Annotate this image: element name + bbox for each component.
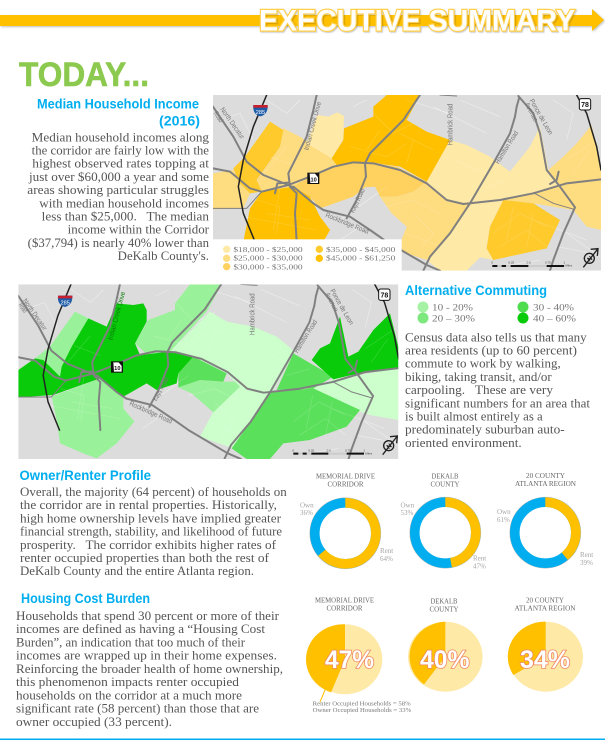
icon: state route 10 shield xyxy=(307,173,319,184)
income body text: income within the Corridor xyxy=(68,223,210,237)
road labels xyxy=(17,288,354,426)
scale bar: 0.5 xyxy=(327,448,331,452)
road labels: Hamilton Road xyxy=(293,319,319,354)
commuting body text: oriented environment. xyxy=(405,436,522,450)
scale bar: 0 xyxy=(491,261,493,265)
pie: dekalb county: 40% xyxy=(420,646,470,674)
road labels: Avenue xyxy=(323,292,339,313)
road labels xyxy=(212,98,554,236)
donut: dekalb county: COUNTY xyxy=(430,480,460,488)
legend: income: $18,000 - $25,000 xyxy=(233,245,303,254)
pie: memorial drive corridor: 47% xyxy=(325,646,374,674)
housing cost body text: Households that spend 30 percent or more of their xyxy=(16,609,280,623)
legend: commuting: 40 – 60% xyxy=(533,314,576,324)
commuting body text xyxy=(405,330,590,450)
legend: income xyxy=(213,239,402,271)
banner title: EXECUTIVE SUMMARY xyxy=(259,4,575,38)
owner renter body text xyxy=(20,485,287,578)
housing cost body text: significant rate (58 percent) than those that are xyxy=(16,702,259,716)
owner renter body text: high home ownership levels have implied greater xyxy=(20,511,282,525)
income body text: Median household incomes along xyxy=(32,130,210,144)
scale bar: 0 xyxy=(292,448,294,452)
donut: dekalb county: Own xyxy=(400,502,415,510)
pie: 20 county atlanta region: 20 COUNTY xyxy=(526,596,565,605)
donut: 20 county atlanta region: 20 COUNTY xyxy=(526,471,566,480)
pie: dekalb county xyxy=(408,596,483,692)
icon: north arrow xyxy=(383,436,397,455)
banner arrow xyxy=(0,9,604,31)
scale bar: 0.25 xyxy=(308,448,314,452)
commuting body text: Census data also tells us that many xyxy=(405,330,587,344)
panel: housing cost burden text xyxy=(16,590,283,729)
owner renter body text: prosperity. The corridor exhibits higher rates of xyxy=(20,538,277,552)
donut: memorial drive corridor: Rent xyxy=(380,547,393,555)
income body text: less than $25,000. The median xyxy=(42,210,210,224)
road labels: North Decatur xyxy=(218,106,245,141)
icon: interstate 285 shield xyxy=(58,296,72,307)
icon: north arrow: N xyxy=(587,256,594,263)
scale bar: 1 xyxy=(563,261,565,265)
panel: median household income text xyxy=(27,96,210,263)
scale bar: 0.5 xyxy=(527,261,531,265)
heading: median household income xyxy=(37,96,200,128)
housing cost body text: owner occupied (33 percent). xyxy=(16,715,172,729)
commuting body text: is built almost entirely as a xyxy=(405,410,543,424)
map: alternative commuting xyxy=(17,284,399,459)
scale bar: 1 xyxy=(363,448,365,452)
donut: memorial drive corridor xyxy=(300,472,393,569)
legend: commuting: 30 - 40% xyxy=(533,304,574,314)
road labels: Avenue xyxy=(523,102,539,123)
commuting body text: predominately suburban auto- xyxy=(405,423,565,437)
icon: US 78 shield xyxy=(579,99,591,110)
pie: memorial drive corridor: Renter Occupied Households = 58% xyxy=(313,702,411,708)
donut: dekalb county: DEKALB xyxy=(432,472,459,480)
housing cost body text: incomes are wrapped up in their home expenses. xyxy=(16,649,277,663)
heading: median household income: Median Household Income xyxy=(37,96,199,112)
donut: 20 county atlanta region: 39% xyxy=(580,559,593,567)
commuting body text: carpooling. These are very xyxy=(405,383,554,397)
road labels: Ponce de Leon xyxy=(328,288,354,326)
income body text: just over $60,000 a year and some xyxy=(28,170,209,184)
icon: US 78 shield: 78 xyxy=(380,292,388,299)
scale bar xyxy=(292,448,373,455)
icon: state route 10 shield: 10 xyxy=(114,366,120,372)
icon: interstate 285 shield: 285 xyxy=(60,301,70,307)
income body text: ($37,794) is nearly 40% lower than xyxy=(28,236,210,250)
road labels: Rockbridge Road xyxy=(324,212,370,236)
icon: US 78 shield xyxy=(379,289,390,300)
owner renter body text: DeKalb County and the entire Atlanta region. xyxy=(20,564,254,578)
commuting body text: area residents (up to 60 percent) xyxy=(405,344,577,358)
pie: 20 county atlanta region: ATLANTA REGION xyxy=(514,604,576,613)
donut: 20 county atlanta region: Own xyxy=(497,508,511,516)
donut: memorial drive corridor: CORRIDOR xyxy=(328,480,364,488)
donut: dekalb county: Rent xyxy=(473,554,486,562)
legend: commuting: 20 – 30% xyxy=(432,314,475,324)
donut: 20 county atlanta region: Rent xyxy=(580,551,593,559)
income body text: DeKalb County's. xyxy=(118,249,209,263)
heading: housing cost burden: Housing Cost Burden xyxy=(21,590,150,606)
donut: memorial drive corridor: 36% xyxy=(300,509,313,517)
pie: 20 county atlanta region: 34% xyxy=(520,646,570,674)
legend: commuting xyxy=(418,302,576,324)
icon: north arrow: N xyxy=(386,443,393,451)
legend: income: $35,000 - $45,000 xyxy=(326,245,396,254)
header banner: executive summary xyxy=(0,4,604,38)
housing cost body text xyxy=(16,609,283,729)
donut: dekalb county xyxy=(400,472,486,570)
scale bar xyxy=(491,261,573,268)
pie: memorial drive corridor: MEMORIAL DRIVE xyxy=(315,596,374,605)
donut: memorial drive corridor: Own xyxy=(300,502,314,510)
commuting body text: significant numbers for an area that xyxy=(405,396,590,410)
road labels: Indian Creek Drive xyxy=(304,101,323,151)
donut: 20 county atlanta region: 61% xyxy=(497,516,510,524)
map: median household income xyxy=(212,95,601,271)
housing cost body text: Burden”, an indication that too much of their xyxy=(16,636,246,650)
donut: 20 county atlanta region: ATLANTA REGION xyxy=(515,479,577,488)
pie: memorial drive corridor xyxy=(306,596,411,714)
legend: income: $45,000 - $61,250 xyxy=(326,254,396,263)
heading: today: TODAY... xyxy=(19,56,149,94)
panel: owner renter profile text xyxy=(20,467,287,578)
housing cost body text: this phenomenon impacts renter occupied xyxy=(16,675,240,689)
road labels: North Decatur xyxy=(21,298,48,332)
road labels: Road xyxy=(17,302,28,314)
scale bar: Miles xyxy=(365,451,373,455)
housing cost body text: incomes are defined as having a “Housing Cost xyxy=(16,622,265,636)
donut: memorial drive corridor: MEMORIAL DRIVE xyxy=(316,472,375,480)
legend: commuting: 10 - 20% xyxy=(432,304,473,314)
housing cost body text: households on the corridor at a much more xyxy=(16,688,242,702)
heading: median household income: (2016) xyxy=(159,112,200,128)
icon: state route 10 shield: 10 xyxy=(311,177,317,183)
income body text: with median household incomes xyxy=(39,196,209,210)
donut: dekalb county: 53% xyxy=(400,509,414,517)
scale bar: 0.75 xyxy=(545,261,551,265)
donut: 20 county atlanta region xyxy=(497,471,593,568)
scale bar: 0.75 xyxy=(345,448,351,452)
road labels: Indian Creek Drive xyxy=(108,291,127,341)
commuting body text: commute to work by walking, xyxy=(405,357,561,371)
income body text: highest observed rates topping at xyxy=(32,157,209,171)
icon: state route 10 shield xyxy=(111,361,123,373)
scale bar: 0.25 xyxy=(508,261,514,265)
panel: alternative commuting text xyxy=(405,282,590,450)
pie: memorial drive corridor: Owner Occupied Households = 33% xyxy=(313,708,411,714)
icon: north arrow xyxy=(583,249,598,267)
housing cost body text: Reinforcing the broader health of home ownership, xyxy=(16,662,283,676)
icon: interstate 285 shield xyxy=(253,105,268,116)
donut: memorial drive corridor: 64% xyxy=(380,555,393,563)
road labels: Hambrick Road xyxy=(249,293,256,335)
road labels: Kays Road xyxy=(349,188,367,214)
pie: memorial drive corridor: CORRIDOR xyxy=(326,604,363,613)
heading: alternative commuting: Alternative Commuting xyxy=(405,282,547,298)
pie: dekalb county: DEKALB xyxy=(430,596,458,605)
donut: dekalb county: 47% xyxy=(473,562,486,570)
road labels: Road xyxy=(212,110,224,124)
owner renter body text: renter occupied properties than both the rest of xyxy=(20,551,270,565)
icon: US 78 shield: 78 xyxy=(581,102,589,109)
scale bar: Miles xyxy=(565,264,573,268)
pie: dekalb county: COUNTY xyxy=(430,604,459,613)
owner renter body text: financial strength, stability, and likelihood of future xyxy=(20,525,282,539)
heading: owner renter profile: Owner/Renter Profile xyxy=(20,467,151,483)
owner renter body text: Overall, the majority (64 percent) of households on xyxy=(20,485,287,499)
legend: income: $25,000 - $30,000 xyxy=(233,254,303,263)
road labels: Hamilton Road xyxy=(494,130,520,165)
road labels: Hambrick Road xyxy=(448,104,455,145)
chart: housing cost burden pies xyxy=(306,596,583,714)
commuting body text: biking, taking transit, and/or xyxy=(405,370,552,384)
legend: income: $30,000 - $35,000 xyxy=(233,262,303,271)
income body text xyxy=(27,130,210,263)
owner renter body text: the corridor are in rental properties. Historically, xyxy=(20,498,277,512)
income body text: the corridor are fairly low with the xyxy=(32,144,209,158)
pie: 20 county atlanta region xyxy=(508,596,583,692)
icon: interstate 285 shield: 285 xyxy=(256,110,265,116)
road labels: Ponce de Leon xyxy=(528,98,554,136)
road labels: Kays Road xyxy=(152,376,171,403)
income body text: areas showing particular struggles xyxy=(27,183,209,197)
road labels: Rockbridge Road xyxy=(128,400,173,426)
chart: owner renter donuts xyxy=(300,471,593,570)
